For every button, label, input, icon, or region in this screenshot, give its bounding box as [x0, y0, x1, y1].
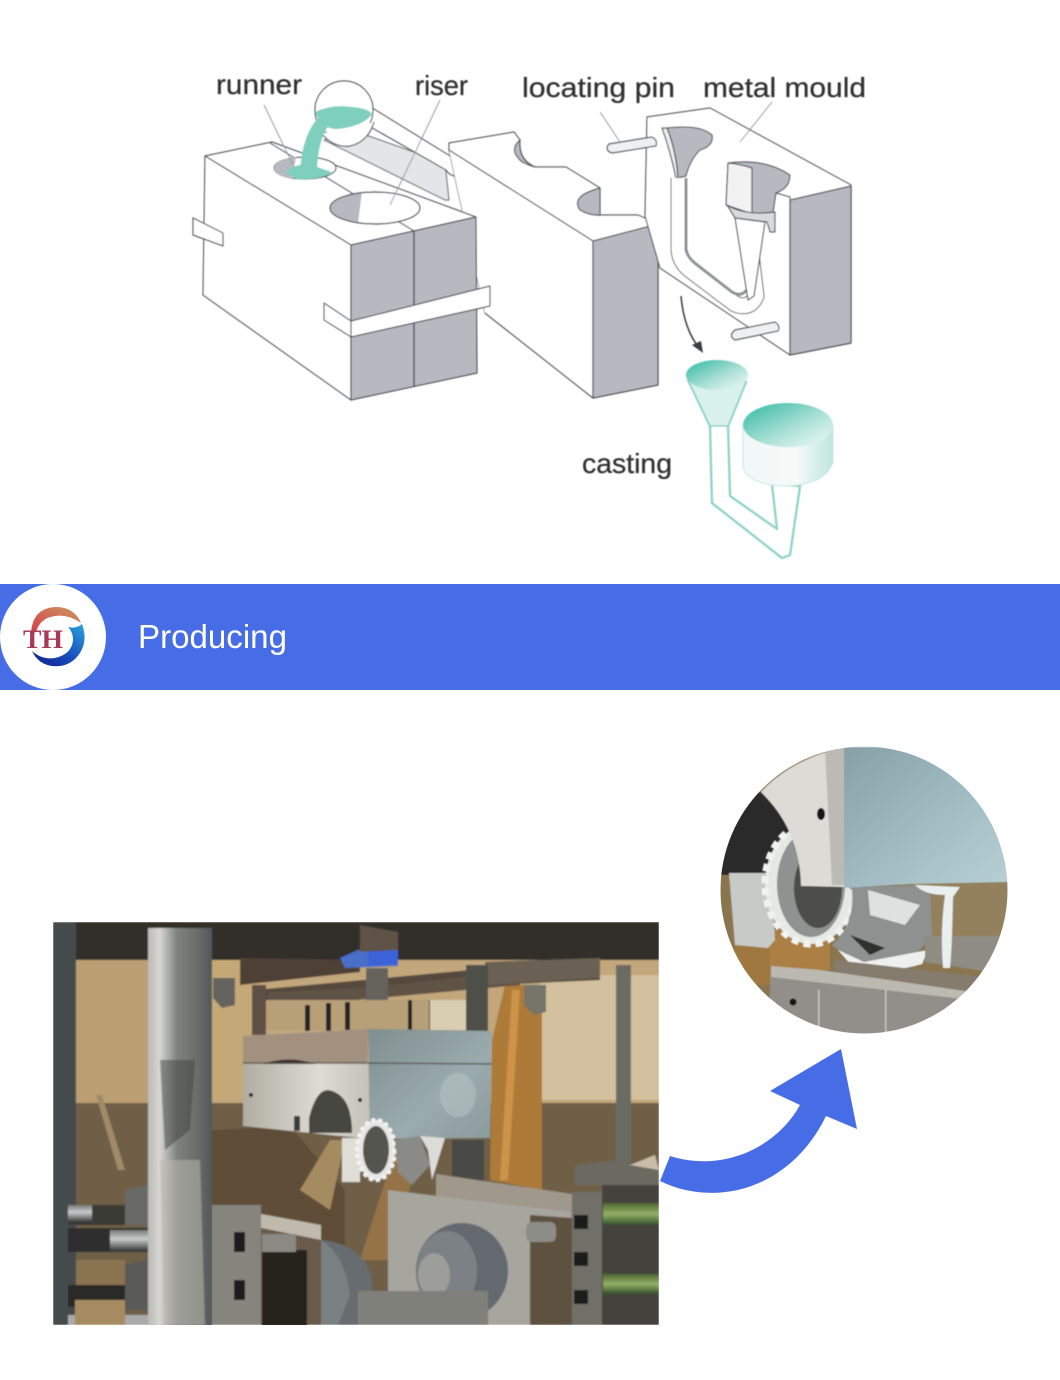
blue block	[340, 950, 398, 968]
leader lines	[264, 100, 772, 205]
metal stream	[300, 118, 330, 172]
right post	[616, 965, 631, 1190]
runner hole	[274, 157, 336, 179]
photo: casting machine	[53, 922, 659, 1328]
logo badge: TH	[23, 625, 63, 654]
riser hole	[330, 192, 420, 224]
ladle pouring metal	[315, 81, 458, 200]
left big column	[148, 928, 212, 1328]
white mould face	[761, 747, 844, 887]
lower left plate	[304, 1238, 320, 1242]
left rods and flanges	[68, 1204, 126, 1226]
wall	[211, 959, 659, 1104]
lower left half mould	[321, 1240, 372, 1325]
mould block: middle half	[449, 132, 658, 398]
suspended mould block	[243, 1029, 370, 1139]
label: casting: casting	[582, 448, 672, 479]
diagram: metal mould casting process	[193, 81, 851, 558]
casting part	[686, 360, 833, 558]
right side details and green rods	[602, 1180, 659, 1325]
background post under block	[452, 1140, 484, 1181]
labels	[216, 69, 866, 479]
logo badge	[0, 584, 106, 690]
mould block: assembled left	[203, 142, 477, 400]
gear	[342, 1138, 360, 1182]
label: metal mould: metal mould	[703, 72, 866, 103]
detail circle: close-up of casting	[720, 747, 1010, 1040]
left frame post	[53, 922, 76, 1325]
label: riser: riser	[415, 70, 468, 101]
locating pin bottom	[732, 322, 779, 340]
lower right plates	[435, 1173, 573, 1219]
label: locating pin: locating pin	[522, 72, 675, 103]
wooden poles	[735, 945, 771, 985]
lower plates	[924, 936, 1000, 972]
white drip	[915, 885, 960, 968]
overhead beam	[53, 922, 659, 960]
blue-grey mould face	[844, 747, 1010, 888]
section banner	[0, 584, 1060, 690]
grey wheel	[416, 1223, 508, 1319]
left clamp tab	[193, 218, 223, 246]
wooden poles	[490, 985, 542, 1190]
banner heading: Producing	[138, 618, 287, 655]
mould block: right half with cavity	[645, 108, 851, 355]
casting hub	[832, 885, 932, 968]
dark background below block	[212, 1126, 345, 1250]
label: runner: runner	[216, 69, 302, 100]
white pillar	[729, 873, 775, 948]
down arrow	[681, 296, 703, 353]
tie rods	[365, 967, 389, 1001]
curved arrow	[660, 1049, 857, 1193]
clamp band	[324, 286, 490, 337]
gear ring	[765, 824, 857, 944]
locating pin top	[607, 137, 656, 153]
backdrop	[720, 749, 1008, 998]
bolts	[213, 978, 235, 1008]
